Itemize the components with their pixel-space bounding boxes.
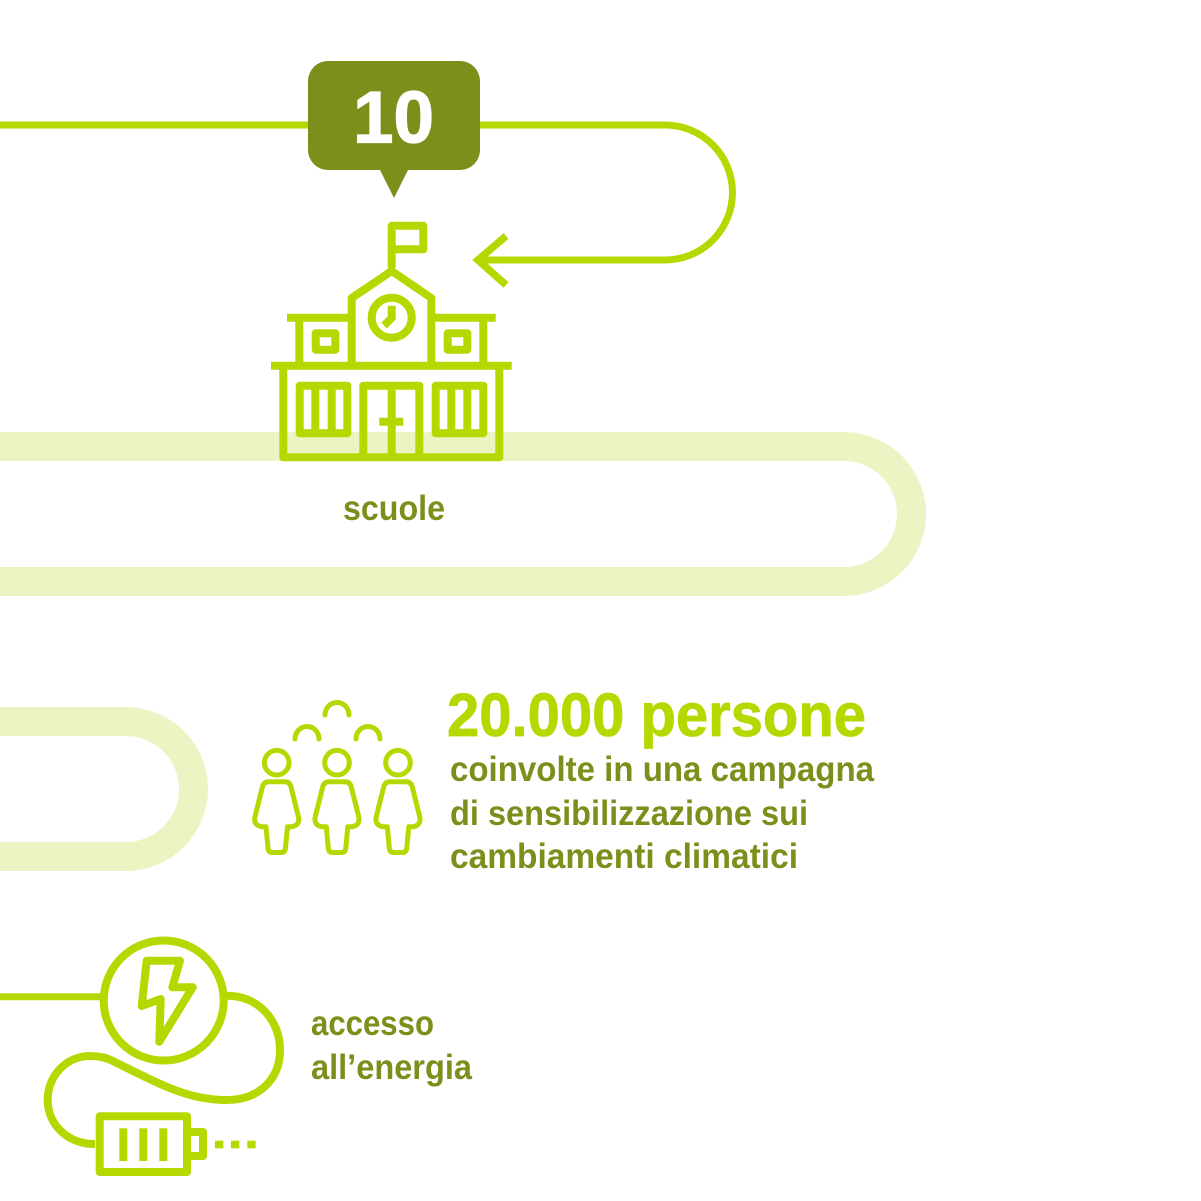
label: accesso all'energia bbox=[311, 1004, 472, 1087]
icon: energy bolt, cable and battery bbox=[0, 940, 280, 1172]
pale winding band: upper bbox=[0, 446, 911, 582]
icon: school building bbox=[271, 226, 512, 457]
pale winding band: lower bbox=[0, 722, 194, 856]
text block: campaign description bbox=[450, 750, 874, 876]
text block: campaign description: cambiamenti climatici bbox=[450, 837, 798, 876]
callout: number of schools bbox=[308, 61, 480, 198]
text block: campaign description: di sensibilizzazione sui bbox=[450, 794, 808, 833]
icon: group of people bbox=[255, 702, 420, 852]
label: accesso all'energia: all’energia bbox=[311, 1048, 472, 1087]
label: accesso all'energia: accesso bbox=[311, 1004, 434, 1043]
text block: campaign description: coinvolte in una campagna bbox=[450, 750, 874, 789]
heading: 20.000 persone: 20.000 persone bbox=[447, 681, 866, 749]
path line with arrow pointing to school bbox=[0, 125, 732, 285]
label: scuole: scuole bbox=[343, 489, 445, 528]
callout: number of schools: 10 bbox=[353, 78, 434, 158]
